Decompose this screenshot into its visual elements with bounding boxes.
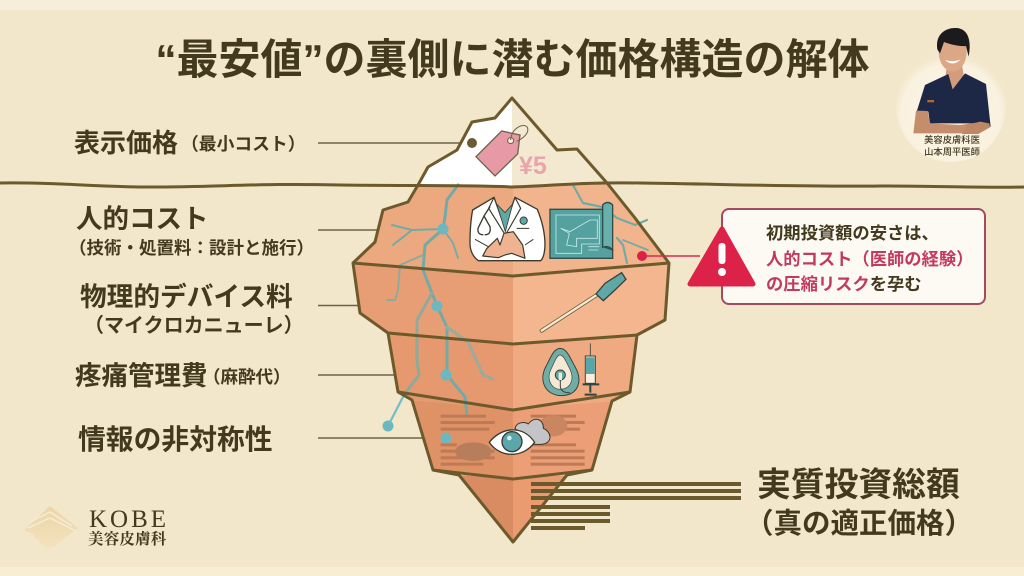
callout: warning	[637, 209, 985, 304]
callout text: 人的コスト（医師の経験）	[766, 249, 973, 269]
logo mark	[24, 506, 78, 548]
outlines	[353, 98, 669, 542]
label: information asymmetry: 情報の非対称性	[78, 424, 273, 455]
iceberg	[353, 98, 669, 542]
icon: warning triangle	[690, 229, 753, 284]
icon: eye and cloud	[489, 419, 550, 454]
total investment bars	[531, 482, 741, 530]
label: displayed price: （最小コスト）	[181, 134, 305, 154]
doctor figure	[913, 28, 991, 134]
icon: doctor coat	[470, 197, 545, 261]
title: “最安値”の裏側に潜む価格構造の解体	[155, 36, 870, 83]
callout box	[722, 209, 985, 304]
label: device cost: （マイクロカニューレ）	[84, 314, 304, 337]
label: device cost	[80, 282, 304, 337]
heading: total investment: 実質投資総額	[757, 466, 960, 504]
band 2	[353, 263, 669, 343]
icon: blueprint	[550, 202, 613, 258]
band 3	[388, 333, 637, 409]
anesthesia mask	[543, 348, 579, 396]
obscured text lines	[441, 415, 585, 466]
label: personnel cost: （技術・処置料：設計と施行）	[69, 238, 314, 258]
iceberg tip	[418, 98, 607, 185]
nodes	[382, 138, 477, 444]
band 4	[412, 400, 612, 479]
label: pain management: （麻酔代）	[203, 367, 290, 387]
cracks	[387, 185, 648, 426]
callout text	[766, 223, 973, 294]
logo text	[88, 506, 169, 548]
label: displayed price: 表示価格	[74, 128, 178, 158]
heading: total investment	[745, 466, 973, 540]
doctor caption: 美容皮膚科医	[924, 134, 980, 145]
label: device cost: 物理的デバイス料	[80, 282, 293, 312]
connector	[637, 251, 700, 261]
icon: microcannula	[542, 273, 626, 331]
label: pain management: 疼痛管理費	[75, 361, 208, 391]
callout text: の圧縮リスクを孕む	[766, 274, 922, 294]
icon: anesthesia mask and syringe	[543, 343, 599, 396]
hands	[483, 232, 525, 258]
logo text: KOBE	[89, 506, 169, 533]
label: personnel cost: 人的コスト	[76, 204, 208, 234]
left leader lines	[318, 143, 472, 438]
label: personnel cost	[69, 204, 314, 258]
band 1	[353, 183, 669, 275]
price: ¥5	[519, 152, 547, 180]
heading: total investment: （真の適正価格）	[745, 508, 973, 540]
callout text: 初期投資額の安さは、	[766, 223, 939, 243]
syringe	[583, 343, 599, 395]
logo text: 美容皮膚科	[88, 529, 167, 548]
bottom point	[459, 475, 567, 542]
icon: price tag	[476, 126, 528, 176]
logo	[24, 506, 169, 548]
doctor caption	[924, 134, 980, 157]
label: pain management	[75, 361, 290, 391]
label: displayed price	[74, 128, 305, 158]
doctor portrait	[896, 28, 1006, 162]
doctor caption: 山本周平医師	[924, 146, 980, 157]
waterline	[0, 183, 1024, 187]
